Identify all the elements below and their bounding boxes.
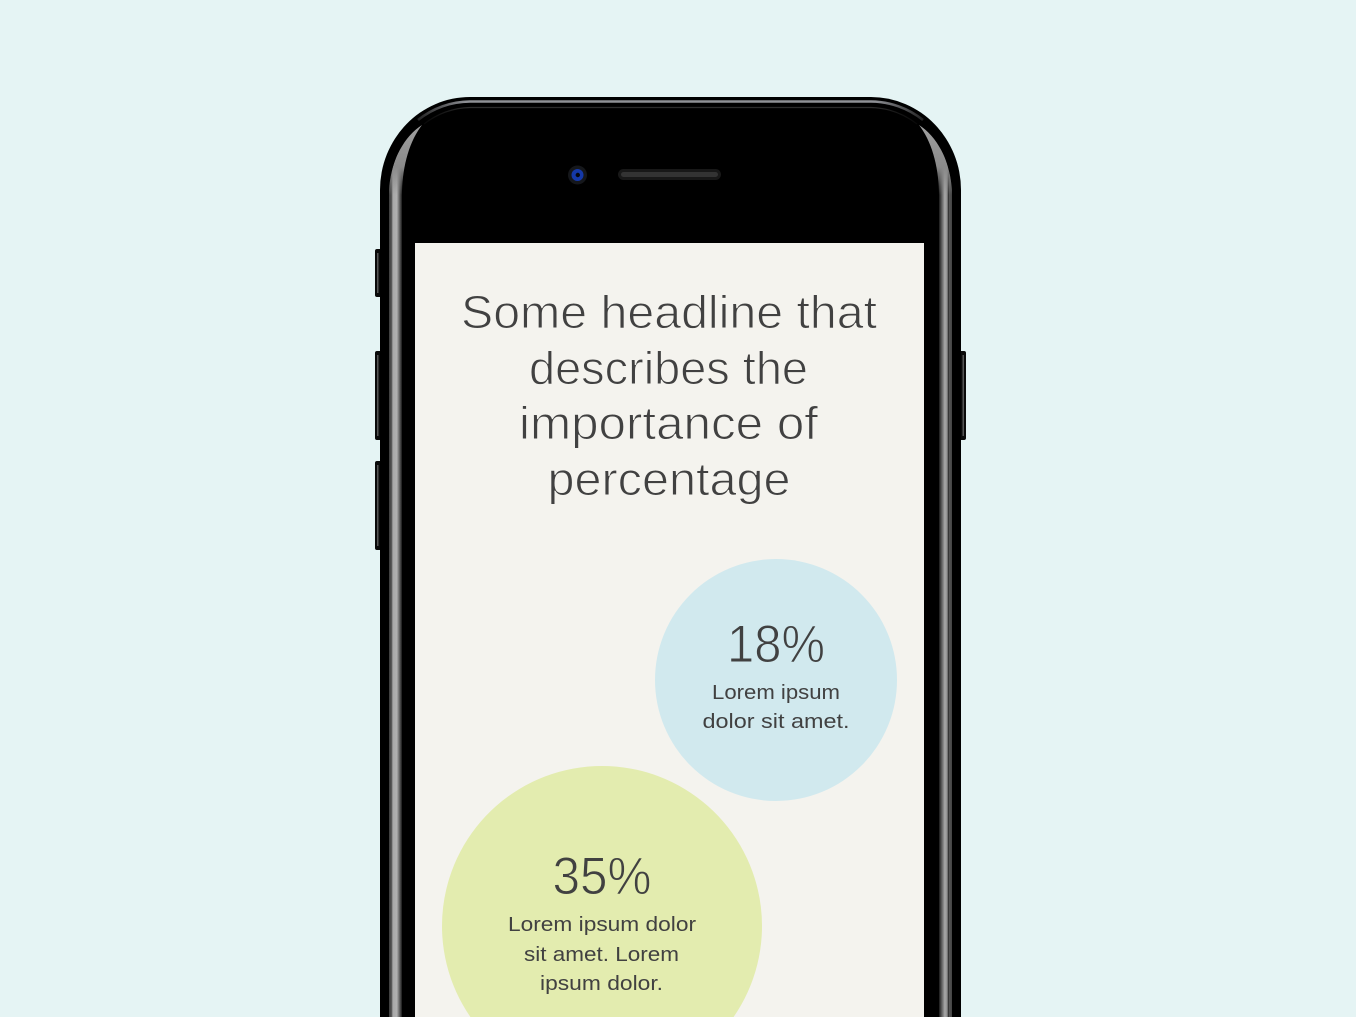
label: 35%: ipsum dolor. [540,972,663,995]
value: 18%: 18% [727,615,825,674]
left edge highlight [389,125,422,1017]
screen [415,243,924,1017]
label: 35% [508,913,696,995]
headline: describes the [529,342,808,394]
headline: Some headline that [461,286,877,338]
label: 35%: Lorem ipsum dolor [508,913,696,936]
label: 18%: dolor sit amet. [702,710,850,733]
circle: 35% [442,766,762,1017]
headline [461,286,877,505]
label: 18%: Lorem ipsum [712,681,840,704]
headline: importance of [519,397,818,449]
label: 35%: sit amet. Lorem [524,943,679,966]
side buttons [375,249,966,550]
left corner crescent [389,125,422,195]
value: 35%: 35% [552,847,652,906]
circle: 18% [655,559,897,801]
right edge highlight [919,125,952,1017]
phone body [380,97,961,1017]
speaker [618,169,721,180]
top bezel inner line [424,108,917,124]
headline: percentage [548,453,790,505]
right corner crescent [919,125,952,195]
camera [568,166,587,184]
phone [375,97,966,1017]
label: 18% [702,681,850,733]
top bezel highlight [418,102,923,120]
